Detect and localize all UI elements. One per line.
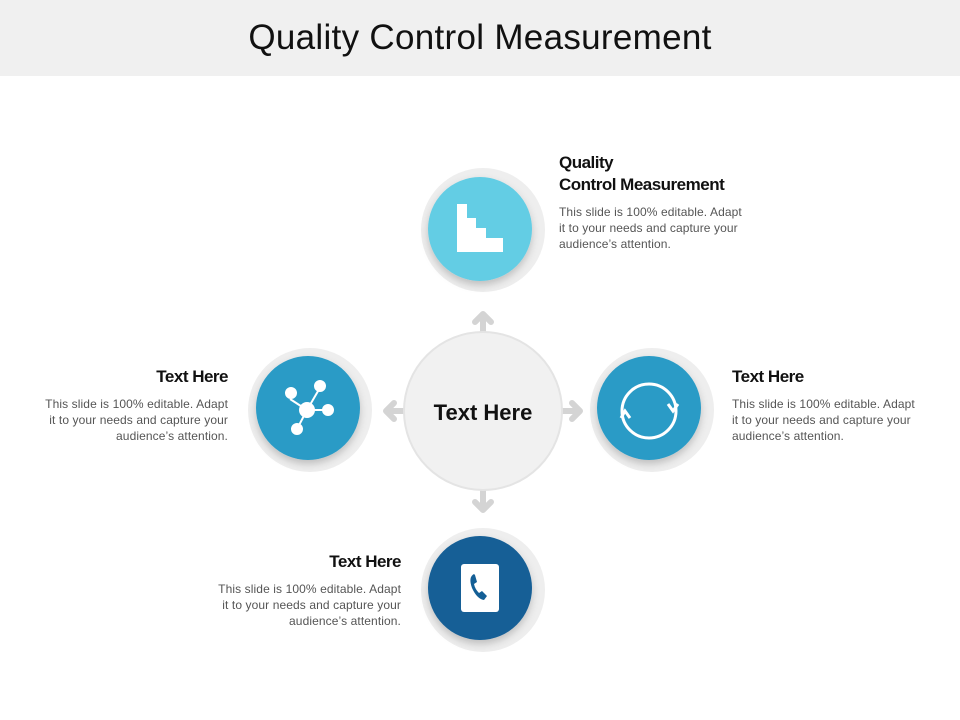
title: Quality Control Measurement	[248, 18, 712, 57]
text block: top: Control Measurement	[559, 175, 724, 194]
text block: bottom: Text Here	[329, 552, 401, 571]
arrows	[386, 314, 580, 510]
text block: right: This slide is 100% editable. Adapt it to your needs and capture your audience’s attention.	[732, 397, 915, 443]
node: bottom	[421, 528, 545, 652]
center circle: Text Here	[434, 400, 532, 425]
text block: top: This slide is 100% editable. Adapt it to your needs and capture your audience’s attention.	[559, 205, 742, 251]
text block: left: This slide is 100% editable. Adapt it to your needs and capture your audience’s attention.	[45, 397, 228, 443]
center circle	[404, 332, 562, 490]
icon: cycle	[621, 384, 678, 438]
text block: bottom	[218, 552, 401, 628]
icon: stairs	[457, 204, 503, 252]
text block: left: Text Here	[156, 367, 228, 386]
text block: right: Text Here	[732, 367, 804, 386]
node: left	[248, 348, 372, 472]
text block: top: Quality	[559, 153, 613, 172]
header bar	[0, 0, 960, 76]
text block: top	[559, 153, 742, 251]
icon: network	[286, 381, 333, 434]
node: right	[590, 348, 714, 472]
icon: phone	[461, 564, 499, 612]
text block: left	[45, 367, 228, 443]
node: top	[421, 168, 545, 292]
text block: bottom: This slide is 100% editable. Adapt it to your needs and capture your audience’s attention.	[218, 582, 401, 628]
text block: right	[732, 367, 915, 443]
